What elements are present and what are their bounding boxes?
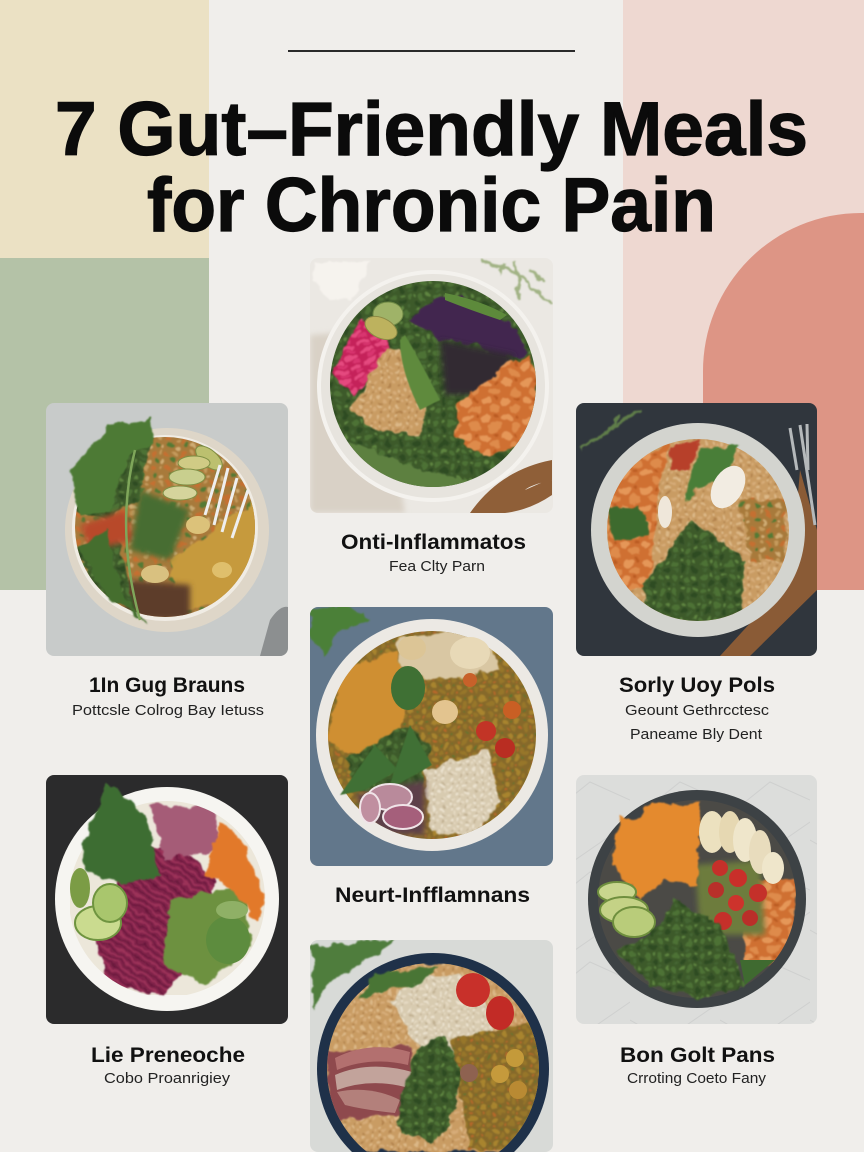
label: right meal: Paneame Bly Dent — [630, 726, 763, 743]
label: lower right meal: Crroting Coeto Fany — [627, 1070, 767, 1087]
panel: lower right meal photo — [576, 775, 817, 1024]
panel: top centre meal photo — [310, 258, 553, 513]
label: top centre meal: Onti-Inflammatos — [341, 531, 526, 554]
background arch: salmon — [703, 213, 864, 590]
panel: lower left meal photo — [46, 775, 288, 1024]
label: left meal: Pottcsle Colrog Bay Ietuss — [72, 702, 264, 719]
background block: blush pink — [623, 0, 864, 590]
label: top centre meal — [341, 531, 526, 575]
label: left meal: 1In Gug Brauns — [89, 674, 245, 697]
panel: left meal photo — [46, 403, 288, 656]
title: 7 Gut–Friendly Meals — [55, 87, 808, 172]
label: right meal: Geount Gethrcctesc — [625, 702, 770, 719]
label: top centre meal: Fea Clty Parn — [389, 558, 485, 575]
panel: bottom centre meal photo — [310, 940, 553, 1152]
label: lower left meal: Cobo Proanrigiey — [104, 1070, 231, 1087]
label: right meal: Sorly Uoy Pols — [619, 674, 775, 697]
label: lower right meal — [620, 1044, 775, 1087]
title — [55, 87, 808, 248]
label: lower right meal: Bon Golt Pans — [620, 1044, 775, 1067]
label: centre meal: Neurt-Infflamnans — [335, 884, 530, 907]
top rule — [288, 50, 575, 52]
label: left meal — [72, 674, 264, 719]
background block: cream — [0, 0, 209, 258]
label: lower left meal — [91, 1044, 245, 1087]
label: lower left meal: Lie Preneoche — [91, 1044, 245, 1067]
title: for Chronic Pain — [147, 163, 716, 248]
panel: right meal photo — [576, 403, 817, 656]
label: right meal — [619, 674, 775, 743]
panel: centre meal photo — [310, 605, 553, 866]
background block: sage green — [0, 258, 209, 590]
